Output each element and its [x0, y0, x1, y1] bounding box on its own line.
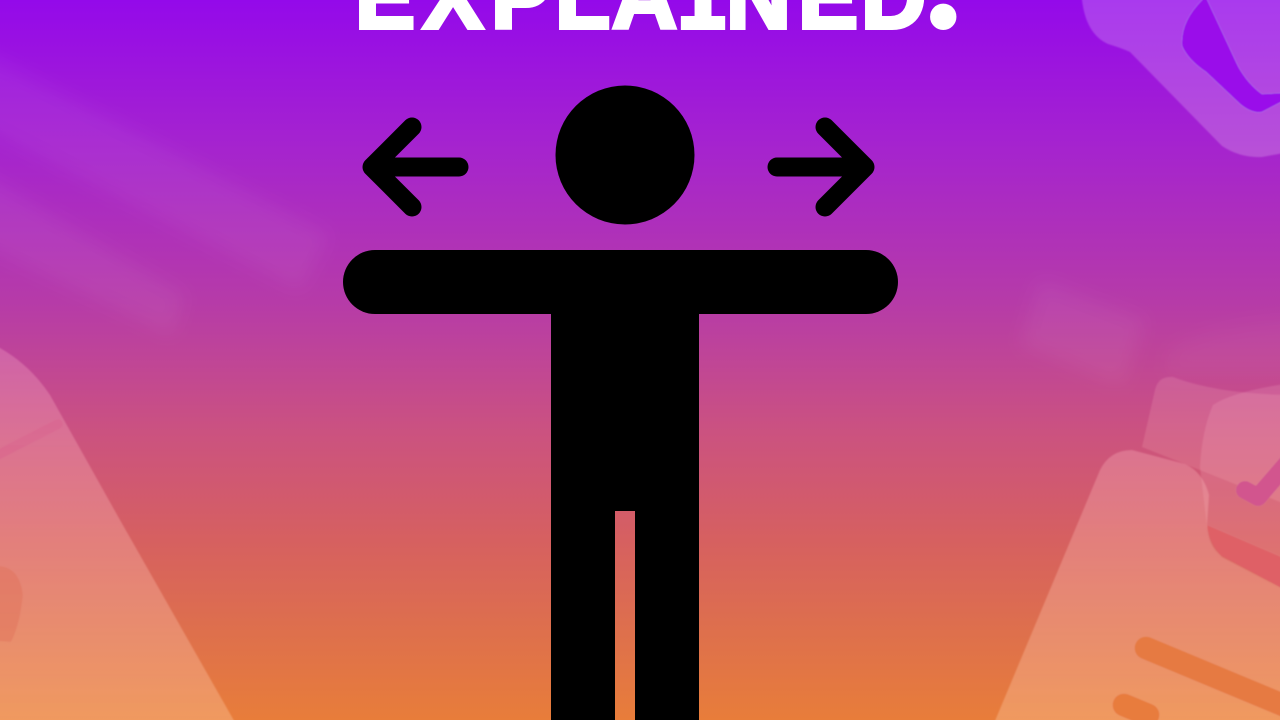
clipboard left mark — [0, 566, 23, 642]
back sheet — [1200, 382, 1280, 570]
dark band — [1207, 525, 1280, 598]
background: faint blurred shapes — [0, 40, 1280, 385]
line two — [1124, 705, 1148, 715]
arms — [343, 250, 898, 314]
body and legs — [551, 300, 699, 720]
arrow: left — [372, 127, 459, 207]
icon: clipboard left — [0, 338, 245, 720]
icon: clipboard top right — [1082, 0, 1280, 157]
check mark — [1245, 460, 1280, 497]
arrow: right — [777, 127, 865, 207]
front sheet — [987, 450, 1280, 720]
line one — [1146, 648, 1280, 710]
head — [556, 86, 694, 224]
clipboard left line — [0, 424, 58, 459]
figure with outstretched arms — [343, 86, 898, 720]
back sheet tab — [1142, 377, 1280, 510]
icon: clipboard right — [987, 377, 1280, 720]
